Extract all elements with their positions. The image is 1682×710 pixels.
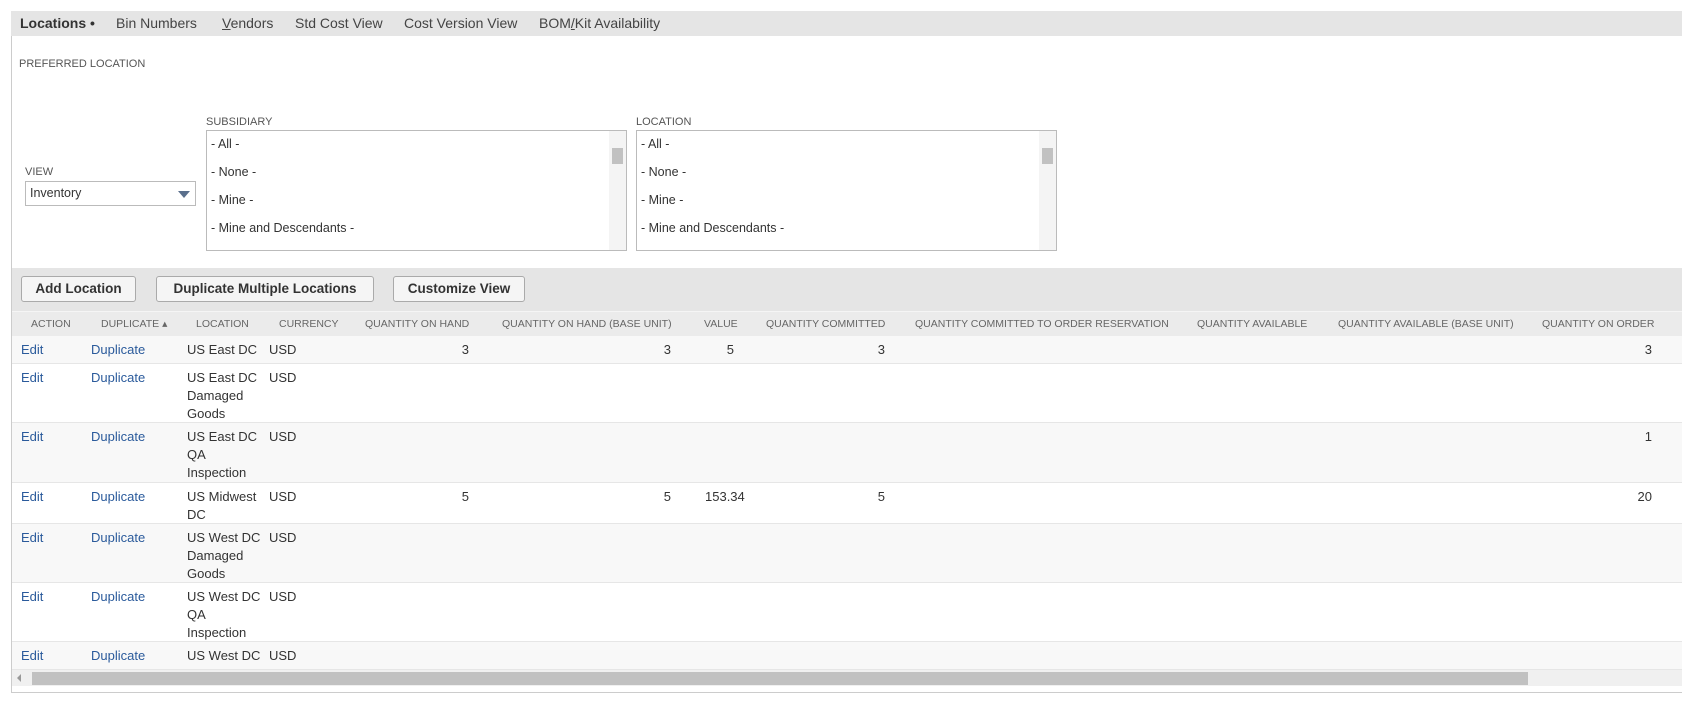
text: QUANTITY AVAILABLE (BASE UNIT) [1338,318,1514,330]
tab: std cost view: Std Cost View [295,15,383,31]
button: duplicate multiple locations: Duplicate Multiple Locations [173,281,356,296]
row: US Midwest DC: 5 [878,489,885,504]
location field: - Mine - [641,193,683,207]
text: QUANTITY COMMITTED TO ORDER RESERVATION [915,318,1169,330]
row: US East DC: 3 [1645,342,1652,357]
row: US East DC QA Inspection: 1 [1645,429,1652,444]
row: US West DC [12,642,1682,670]
text: QUANTITY COMMITTED [766,318,885,330]
view field [25,166,196,206]
row: US West DC Damaged Goods: Edit [21,530,43,545]
row: US West DC QA Inspection: Duplicate [91,589,145,604]
tab: locations active: Locations • [20,15,95,31]
row: US West DC: Edit [21,648,43,663]
row: US Midwest DC [12,483,1682,524]
table header [12,311,1682,336]
icon: dropdown arrow [178,191,190,198]
row: US West DC: USD [269,648,296,663]
row: US West DC QA Inspection [12,583,1682,642]
text: ACTION [31,318,71,330]
row: US Midwest DC: 153.34 [705,489,745,504]
location field [636,116,1057,251]
location field: - Mine and Descendants - [641,221,784,235]
row: US East DC: 5 [727,342,734,357]
row: US East DC QA Inspection: USD [269,429,296,444]
row: US East DC: 3 [664,342,671,357]
button: add location [21,276,136,302]
row: US West DC QA Inspection: QA [187,607,206,622]
row: US East DC Damaged Goods [12,364,1682,423]
location field: - None - [641,165,686,179]
row: US East DC [12,336,1682,364]
row: US East DC QA Inspection: Duplicate [91,429,145,444]
row: US West DC Damaged Goods: USD [269,530,296,545]
horizontal scrollbar [12,670,1682,686]
row: US East DC Damaged Goods: USD [269,370,296,385]
row: US West DC QA Inspection: Edit [21,589,43,604]
button: duplicate multiple locations [156,276,374,302]
subsidiary field: SUBSIDIARY [206,116,272,128]
row: US East DC QA Inspection: Inspection [187,465,246,480]
row: US East DC Damaged Goods: Edit [21,370,43,385]
row: US East DC Damaged Goods: Duplicate [91,370,145,385]
subsidiary field: - Mine - [211,193,253,207]
subsidiary field: - All - [211,137,239,151]
subsidiary field: - None - [211,165,256,179]
row: US West DC: Duplicate [91,648,145,663]
tab: bom kit availability: BOM/Kit Availability [539,15,660,31]
tab: cost version view: Cost Version View [404,15,517,31]
view field: VIEW [25,166,53,178]
row: US East DC: US East DC [187,342,257,357]
row: US West DC Damaged Goods: Goods [187,566,225,581]
tab: bin numbers: Bin Numbers [116,15,197,31]
row: US East DC QA Inspection: QA [187,447,206,462]
row: US Midwest DC: US Midwest [187,489,256,504]
row: US West DC Damaged Goods: Damaged [187,548,243,563]
text: DUPLICATE ▴ [101,318,167,330]
button: customize view [393,276,525,302]
row: US East DC: 3 [878,342,885,357]
row: US East DC Damaged Goods: Goods [187,406,225,421]
row: US Midwest DC: USD [269,489,296,504]
row: US West DC Damaged Goods [12,524,1682,583]
text: QUANTITY ON HAND [365,318,469,330]
text: QUANTITY ON ORDER [1542,318,1654,330]
row: US East DC: Edit [21,342,43,357]
row: US West DC QA Inspection: USD [269,589,296,604]
row: US East DC: 3 [462,342,469,357]
button: customize view: Customize View [408,281,510,296]
tab bar [11,11,1682,36]
row: US Midwest DC: Duplicate [91,489,145,504]
text: VALUE [704,318,738,330]
row: US Midwest DC: 5 [462,489,469,504]
view field: Inventory [30,186,81,200]
location field: - All - [641,137,669,151]
tab: vendors: Vendors [222,15,273,31]
row: US East DC QA Inspection: US East DC [187,429,257,444]
row: US West DC Damaged Goods: US West DC [187,530,260,545]
location field: LOCATION [636,116,691,128]
row: US Midwest DC: DC [187,507,206,522]
row: US Midwest DC: 5 [664,489,671,504]
row: US West DC: US West DC [187,648,260,663]
row: US Midwest DC: 20 [1638,489,1652,504]
button: add location: Add Location [35,281,122,296]
table rows [12,342,1682,670]
text: QUANTITY AVAILABLE [1197,318,1307,330]
subsidiary field: - Mine and Descendants - [211,221,354,235]
row: US Midwest DC: Edit [21,489,43,504]
subsidiary field [206,116,627,251]
row: US West DC QA Inspection: Inspection [187,625,246,640]
row: US East DC: Duplicate [91,342,145,357]
row: US East DC: USD [269,342,296,357]
row: US East DC QA Inspection: Edit [21,429,43,444]
toolbar band [12,268,1682,311]
text: QUANTITY ON HAND (BASE UNIT) [502,318,672,330]
row: US West DC Damaged Goods: Duplicate [91,530,145,545]
heading: preferred location: PREFERRED LOCATION [19,58,145,70]
row: US East DC Damaged Goods: Damaged [187,388,243,403]
row: US West DC QA Inspection: US West DC [187,589,260,604]
text: CURRENCY [279,318,339,330]
row: US East DC Damaged Goods: US East DC [187,370,257,385]
row: US East DC QA Inspection [12,423,1682,483]
text: LOCATION [196,318,249,330]
